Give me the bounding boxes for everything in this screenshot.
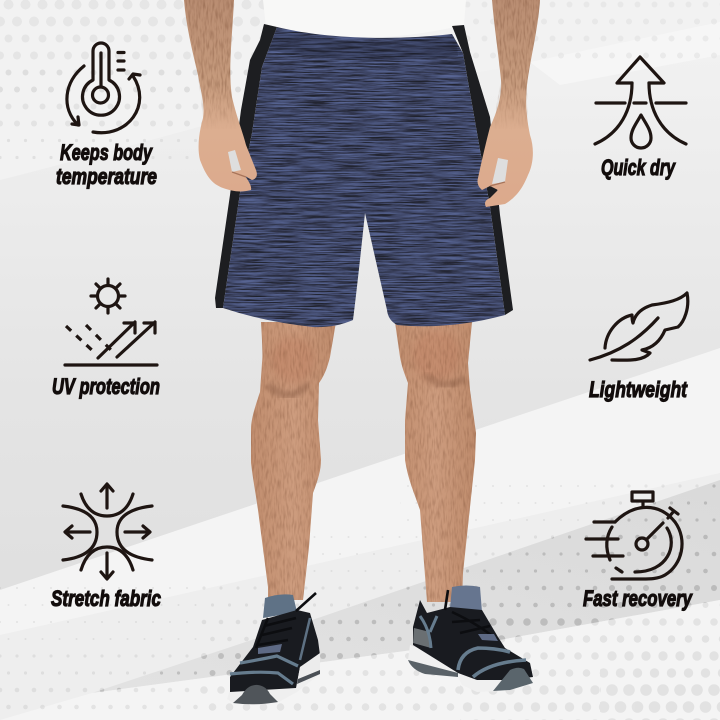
right shoe — [408, 586, 533, 692]
heather blue shorts fabric — [223, 27, 505, 328]
icon: stopwatch — [586, 492, 682, 579]
feature: stretch fabric — [51, 484, 161, 611]
icon: rising arrow and droplet — [595, 57, 686, 148]
icon: sun and reflected rays — [65, 279, 157, 365]
label: Stretch fabric — [51, 586, 161, 611]
feature: lightweight — [589, 293, 688, 402]
feature: UV protection — [52, 279, 160, 399]
label — [56, 140, 157, 189]
feature: keeps body temperature — [56, 43, 157, 189]
model wearing shorts — [180, 0, 545, 704]
icon: feather — [590, 293, 688, 360]
right arm and hand — [478, 0, 540, 207]
arm hair — [180, 0, 545, 130]
label: Lightweight — [589, 377, 688, 402]
feature: quick dry — [595, 57, 686, 180]
feature: fast recovery — [583, 492, 693, 611]
black side panels — [215, 24, 513, 315]
label: UV protection — [52, 374, 160, 399]
label: Keeps body — [60, 140, 153, 165]
left shoe — [227, 593, 320, 704]
icon: thermometer with arrows — [67, 43, 140, 133]
left arm and hand — [184, 0, 257, 191]
label: Quick dry — [601, 155, 676, 180]
icon: four-way stretch — [63, 484, 152, 579]
label: temperature — [56, 164, 157, 189]
legs — [245, 320, 480, 605]
white t-shirt — [263, 0, 466, 38]
